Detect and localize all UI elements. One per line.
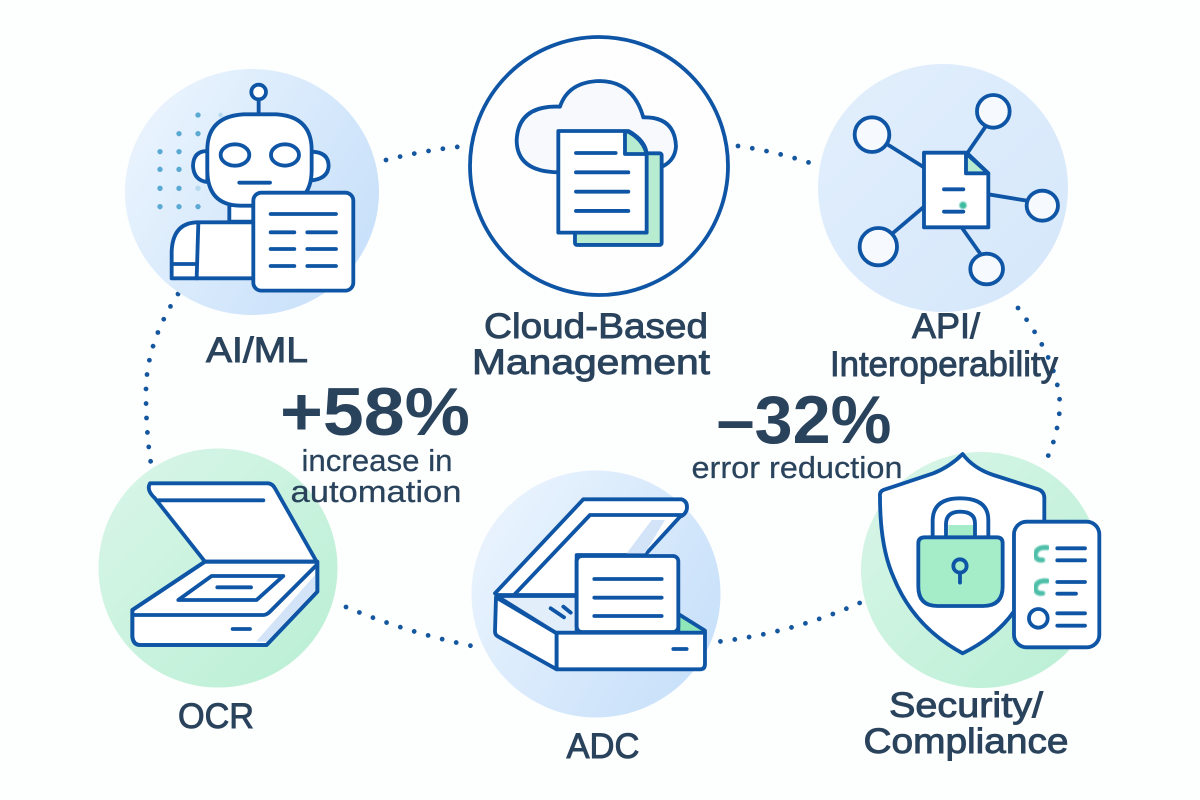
- Security background circle: [861, 452, 1101, 688]
- label: AI/ML: AI/ML: [206, 331, 308, 370]
- label: Cloud-Based Management: Cloud-Based: [484, 307, 708, 346]
- icon: document network: [855, 95, 1058, 284]
- AI/ML background circle: [125, 69, 379, 315]
- ADC background circle: [472, 470, 720, 718]
- panel: OCR: [98, 448, 338, 736]
- label: ADC: ADC: [566, 727, 640, 766]
- callout: -32% error reduction: [692, 382, 902, 485]
- label: Cloud-Based Management: [472, 307, 710, 382]
- panel: ADC: [472, 470, 720, 766]
- panel: Security/Compliance: [861, 452, 1101, 761]
- icon: shield, padlock and checklist: [880, 454, 1099, 653]
- icon: cloud with documents: [517, 81, 676, 245]
- panel: API/Interoperability: [818, 64, 1068, 384]
- label: Cloud-Based Management: Management: [472, 343, 710, 382]
- label: OCR: OCR: [178, 697, 254, 736]
- callout: +58% increase in automation: automation: [290, 474, 462, 509]
- callout: -32% error reduction: –32%: [716, 382, 892, 458]
- callout: +58% increase in automation: increase in: [302, 443, 452, 478]
- label: API/Interoperability: API/: [912, 307, 980, 346]
- dotted connecting ring: [146, 146, 1060, 646]
- label: API/Interoperability: Interoperability: [830, 345, 1058, 384]
- label: Security/Compliance: Security/: [889, 686, 1043, 725]
- callout: -32% error reduction: error reduction: [692, 450, 902, 485]
- icon: robot with document: [157, 85, 353, 291]
- outlined circle: [470, 37, 728, 295]
- panel: Cloud-Based Management: [470, 37, 728, 382]
- label: Security/Compliance: Compliance: [864, 722, 1068, 761]
- icon: open flatbed scanner: [132, 483, 317, 645]
- OCR background circle: [98, 448, 338, 688]
- callout: +58% increase in automation: +58%: [280, 374, 470, 450]
- API background circle: [818, 64, 1068, 312]
- callout: +58% increase in automation: [280, 374, 470, 509]
- label: Security/Compliance: [864, 686, 1068, 761]
- label: API/Interoperability: [830, 307, 1058, 384]
- panel: AI/ML: [125, 69, 379, 370]
- icon: scanner with document: [495, 499, 705, 669]
